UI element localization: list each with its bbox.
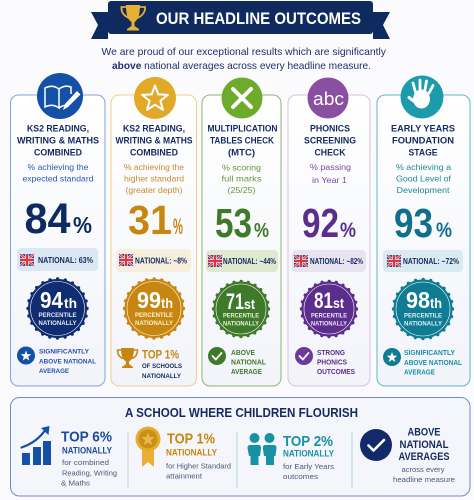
section heading: A SCHOOL WHERE CHILDREN FLOURISH: [125, 405, 358, 420]
card heading: COMBINED: [34, 148, 82, 158]
percentile seal: 81st: st: [333, 295, 344, 311]
callout: top 1% of schools: NATIONALLY: [142, 373, 181, 380]
percentile seal: 81st: [302, 282, 356, 336]
card description: % scoring: [222, 164, 261, 172]
stat: top 1%: NATIONALLY: [166, 448, 217, 458]
percentile seal: 71st: st: [244, 296, 255, 312]
percentile seal: 81st: NATIONALLY: [311, 320, 348, 328]
big number: 92%: %: [340, 219, 356, 242]
callout: top 1% of schools: [118, 348, 182, 380]
callout: top 1% of schools: TOP 1%: [142, 348, 179, 362]
national comparison: ~72%: [383, 250, 463, 272]
card heading: [208, 124, 278, 158]
card description: [222, 164, 262, 195]
card heading: TABLES CHECK: [210, 136, 274, 146]
card description: [124, 163, 184, 195]
panel: KS2 expected standard: [10, 73, 105, 386]
icon: gold medal: [136, 426, 160, 467]
stat: top 2%: outcomes: [283, 472, 318, 481]
national comparison: ~82%: [292, 250, 366, 272]
callout: strong phonics: PHONICS: [317, 360, 347, 366]
stat: above national averages: across every: [402, 465, 445, 474]
icon: hand print: [400, 76, 444, 118]
stat: top 6%: [22, 426, 117, 488]
icon: trophy: [121, 5, 145, 30]
stat: top 6%: TOP 6%: [61, 428, 112, 446]
panel: multiplication tables check: [202, 78, 281, 386]
percentile seal: 98th: th: [430, 295, 442, 311]
callout: significantly above: [383, 348, 463, 376]
national comparison: ~82%: NATIONAL: ~82%: [310, 257, 363, 266]
stat: top 1%: [136, 426, 231, 480]
card description: expected standard: [22, 174, 94, 184]
icon: two children: [248, 433, 276, 465]
card description: full marks: [222, 174, 262, 184]
panel: KS2 higher standard: [111, 77, 196, 386]
panel: phonics screening check: [288, 78, 370, 386]
stat: top 1%: for Higher Standard: [166, 462, 231, 470]
percentile seal: 99th: [124, 279, 184, 338]
percentile seal: 98th: 98: [406, 287, 430, 313]
big number: 93%: 93: [394, 200, 433, 246]
card heading: SCREENING: [304, 136, 356, 146]
card description: Development: [396, 186, 450, 195]
callout: top 1% of schools: OF SCHOOLS: [142, 363, 182, 370]
national comparison: ~72%: NATIONAL: ~72%: [403, 257, 459, 266]
card heading: CHECK: [314, 148, 346, 158]
card description: [310, 163, 351, 185]
national comparison: ~44%: NATIONAL: ~44%: [223, 257, 276, 266]
callout: above national: ABOVE: [231, 350, 255, 357]
big number: 84%: %: [73, 212, 92, 238]
callout: above national: AVERAGE: [231, 369, 262, 376]
big number: 93%: %: [436, 219, 452, 242]
card heading: [17, 124, 99, 158]
percentile seal: 99th: PERCENTILE: [135, 312, 174, 319]
card description: % passing: [310, 163, 351, 172]
national comparison: 63%: NATIONAL: 63%: [38, 256, 93, 265]
card heading: EARLY YEARS: [391, 124, 455, 134]
percentile seal: 94th: 94: [40, 287, 63, 313]
card description: (25/25): [228, 186, 256, 195]
stat: top 6%: & Maths: [61, 478, 90, 488]
icon: star: [134, 77, 176, 119]
percentile seal: 71st: 71: [226, 289, 244, 314]
card heading: WRITING & MATHS: [116, 136, 192, 146]
big number: 84%: 84: [24, 195, 71, 243]
callout: strong phonics: [295, 347, 355, 376]
stat: top 2%: for Early Years: [283, 462, 334, 471]
card heading: PHONICS: [310, 124, 350, 134]
stat: top 2%: [248, 433, 334, 481]
intro text: We are proud of our exceptional results which are significantly: [102, 46, 387, 58]
card heading: MULTIPLICATION: [208, 124, 278, 134]
callout: significantly above: SIGNIFICANTLY: [404, 350, 455, 357]
card heading: STAGE: [408, 148, 438, 158]
percentile seal: 99th: NATIONALLY: [135, 320, 174, 327]
card heading: (MTC): [228, 148, 255, 158]
callout: strong phonics: OUTCOMES: [317, 369, 355, 376]
percentile seal: 99th: 99: [137, 287, 161, 313]
percentile seal: 71st: NATIONALLY: [223, 320, 260, 328]
stat: above national averages: [360, 426, 455, 484]
percentile seal: 98th: NATIONALLY: [404, 320, 443, 328]
card description: Good Level of: [396, 174, 452, 184]
percentile seal: 94th: PERCENTILE: [38, 312, 77, 319]
card description: (greater depth): [126, 186, 183, 195]
national comparison: ~44%: [206, 250, 278, 272]
stat: top 1%: TOP 1%: [167, 430, 215, 448]
callout: above national: NATIONAL: [231, 360, 267, 366]
card description: % achieving the: [28, 163, 89, 172]
card description: % achieving the: [124, 163, 184, 172]
icon: rising bar chart: [22, 426, 51, 465]
national comparison: 63%: [17, 248, 98, 271]
percentile seal: 94th: NATIONALLY: [38, 320, 77, 327]
big number: 53%: 53: [215, 200, 252, 246]
percentile seal: 94th: th: [64, 295, 77, 311]
big number: 92%: 92: [302, 200, 339, 246]
stat: top 6%: for combined: [62, 458, 109, 467]
callout: significantly above: AVERAGE: [39, 368, 69, 375]
card heading: [304, 124, 356, 158]
icon: check mark: [360, 429, 392, 461]
stat: above national averages: headline measure: [393, 475, 455, 484]
card heading: [116, 124, 192, 158]
callout: significantly above: [17, 346, 96, 375]
national comparison: ~8%: NATIONAL: ~8%: [135, 256, 187, 266]
percentile seal: 98th: PERCENTILE: [404, 312, 443, 320]
stat: top 2%: NATIONALLY: [283, 448, 334, 458]
icon: book and pencil: [37, 73, 83, 119]
callout: strong phonics: STRONG: [317, 350, 346, 357]
title banner: [91, 1, 390, 39]
card description: [22, 163, 94, 184]
percentile seal: 71st: [214, 282, 268, 336]
percentile seal: 81st: 81: [314, 288, 333, 313]
icon: abc: abc: [313, 89, 344, 109]
intro text: [102, 46, 387, 72]
big number: 31%: 31: [128, 197, 172, 243]
percentile seal: 98th: [394, 280, 452, 338]
card heading: COMBINED: [130, 148, 178, 158]
card heading: KS2 READING,: [123, 124, 185, 134]
card heading: [391, 124, 455, 158]
panel: a school where children flourish: [10, 398, 470, 496]
callout: significantly above: ABOVE NATIONAL: [39, 358, 96, 366]
stat: above national averages: NATIONAL: [400, 439, 449, 451]
card heading: WRITING & MATHS: [17, 136, 99, 146]
card heading: FOUNDATION: [392, 136, 454, 146]
card heading: KS2 READING,: [27, 124, 89, 134]
stat: above national averages: ABOVE: [408, 426, 440, 438]
percentile seal: 99th: th: [161, 295, 173, 311]
card description: [396, 163, 452, 195]
big number: 31%: %: [173, 214, 183, 239]
stat: top 1%: attainment: [166, 472, 203, 480]
callout: significantly above: ABOVE NATIONAL: [404, 360, 463, 367]
heading text: OUR HEADLINE OUTCOMES: [156, 9, 361, 28]
percentile seal: 71st: PERCENTILE: [223, 312, 259, 320]
callout: above national: [208, 347, 267, 376]
card description: % achieving a: [396, 163, 451, 172]
icon: abc: [308, 78, 348, 118]
big number: 53%: %: [254, 220, 269, 242]
intro text: above national averages across every headline measure.: [112, 60, 371, 72]
card description: in Year 1: [312, 176, 347, 185]
percentile seal: 81st: PERCENTILE: [311, 312, 347, 320]
icon: multiplication sign: [222, 78, 262, 118]
callout: significantly above: AVERAGE: [404, 370, 435, 376]
stat: top 6%: NATIONALLY: [62, 446, 112, 456]
stat: above national averages: AVERAGES: [398, 451, 450, 463]
callout: significantly above: SIGNIFICANTLY: [39, 348, 89, 356]
card description: higher standard: [124, 174, 184, 184]
panel: early years foundation stage: [377, 76, 470, 386]
national comparison: ~8%: [116, 249, 191, 272]
percentile seal: 94th: [28, 279, 87, 338]
stat: top 6%: Reading, Writing: [62, 468, 117, 478]
stat: top 2%: TOP 2%: [283, 433, 333, 450]
